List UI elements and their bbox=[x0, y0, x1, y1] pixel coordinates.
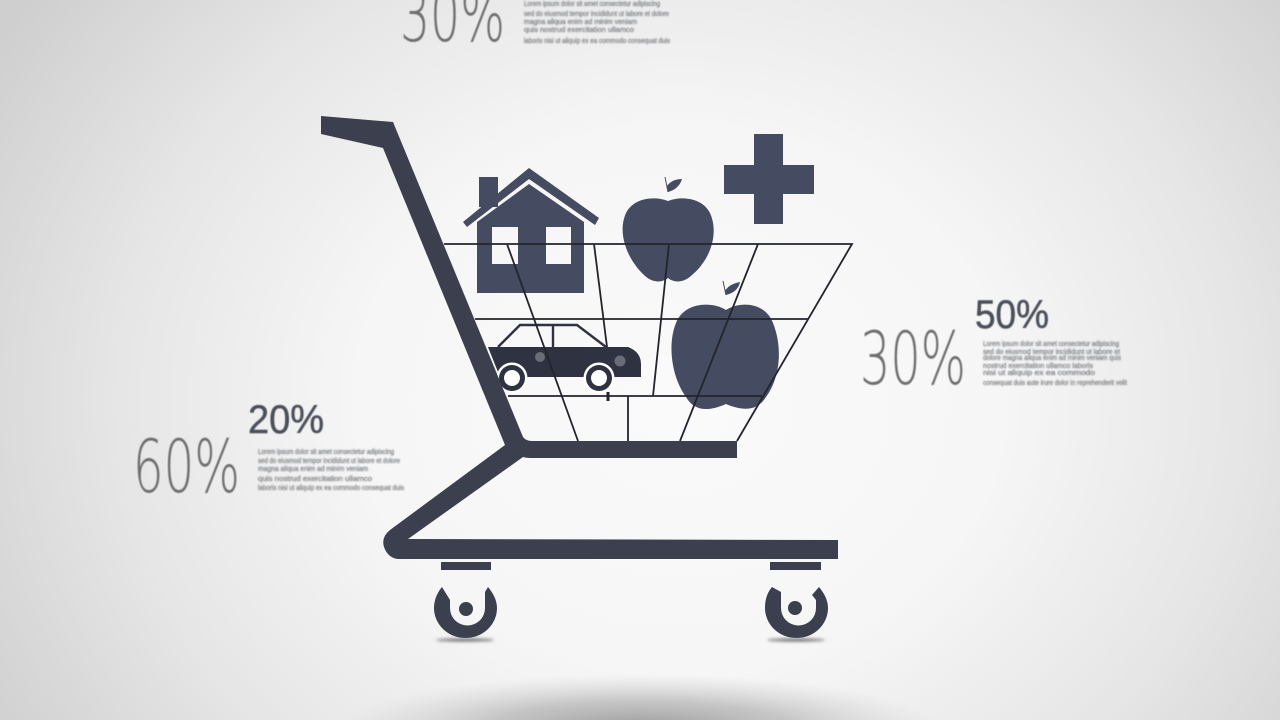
left bold percentage: 20% bbox=[248, 398, 324, 442]
cart frame and handle bbox=[321, 116, 838, 559]
icon: medical plus bbox=[724, 134, 814, 224]
left description: sed do eiusmod tempor incididunt ut labore et dolore bbox=[258, 458, 400, 465]
left description: quis nostrud exercitation ullamco bbox=[258, 476, 372, 483]
right bold percentage: 50% bbox=[975, 293, 1049, 337]
wheel left bbox=[434, 562, 497, 642]
top description: quis nostrud exercitation ullamco bbox=[524, 27, 634, 34]
stat block: right bbox=[860, 293, 1127, 402]
stat block: left bbox=[133, 398, 404, 510]
left description bbox=[258, 449, 404, 492]
wheel right bbox=[765, 562, 828, 642]
floor shadow bbox=[340, 660, 940, 720]
right description: nostrud exercitation ullamco laboris bbox=[983, 363, 1093, 370]
right large percentage: 30% bbox=[860, 317, 966, 402]
icon: car bbox=[488, 325, 641, 394]
right description: dolore magna aliqua enim ad minim veniam quis bbox=[983, 355, 1121, 362]
top description: magna aliqua enim ad minim veniam bbox=[524, 19, 637, 26]
stat block: top bbox=[400, 0, 670, 59]
right description: Lorem ipsum dolor sit amet consectetur adipiscing bbox=[983, 341, 1119, 348]
left large percentage: 60% bbox=[133, 425, 240, 510]
top description: sed do eiusmod tempor incididunt ut labore et dolore bbox=[524, 11, 669, 18]
top description: Lorem ipsum dolor sit amet consectetur adipiscing bbox=[524, 1, 660, 8]
right description bbox=[983, 341, 1127, 387]
top description bbox=[524, 1, 670, 45]
right description: nisi ut aliquip ex ea commodo bbox=[983, 370, 1095, 377]
right description: consequat duis aute irure dolor in reprehenderit velit bbox=[983, 380, 1127, 387]
right description: sed do eiusmod tempor incididunt ut labore et bbox=[983, 349, 1120, 356]
left description: magna aliqua enim ad minim veniam bbox=[258, 466, 368, 473]
left description: laboris nisi ut aliquip ex ea commodo consequat duis bbox=[258, 485, 404, 492]
shopping cart bbox=[321, 116, 838, 642]
icon: apple large bbox=[671, 281, 779, 409]
left description: Lorem ipsum dolor sit amet consectetur adipiscing bbox=[258, 449, 394, 456]
basket wire grid bbox=[444, 244, 852, 441]
top description: laboris nisi ut aliquip ex ea commodo consequat duis bbox=[524, 38, 670, 45]
icon: apple top bbox=[623, 177, 714, 281]
icon: house bbox=[463, 168, 599, 293]
